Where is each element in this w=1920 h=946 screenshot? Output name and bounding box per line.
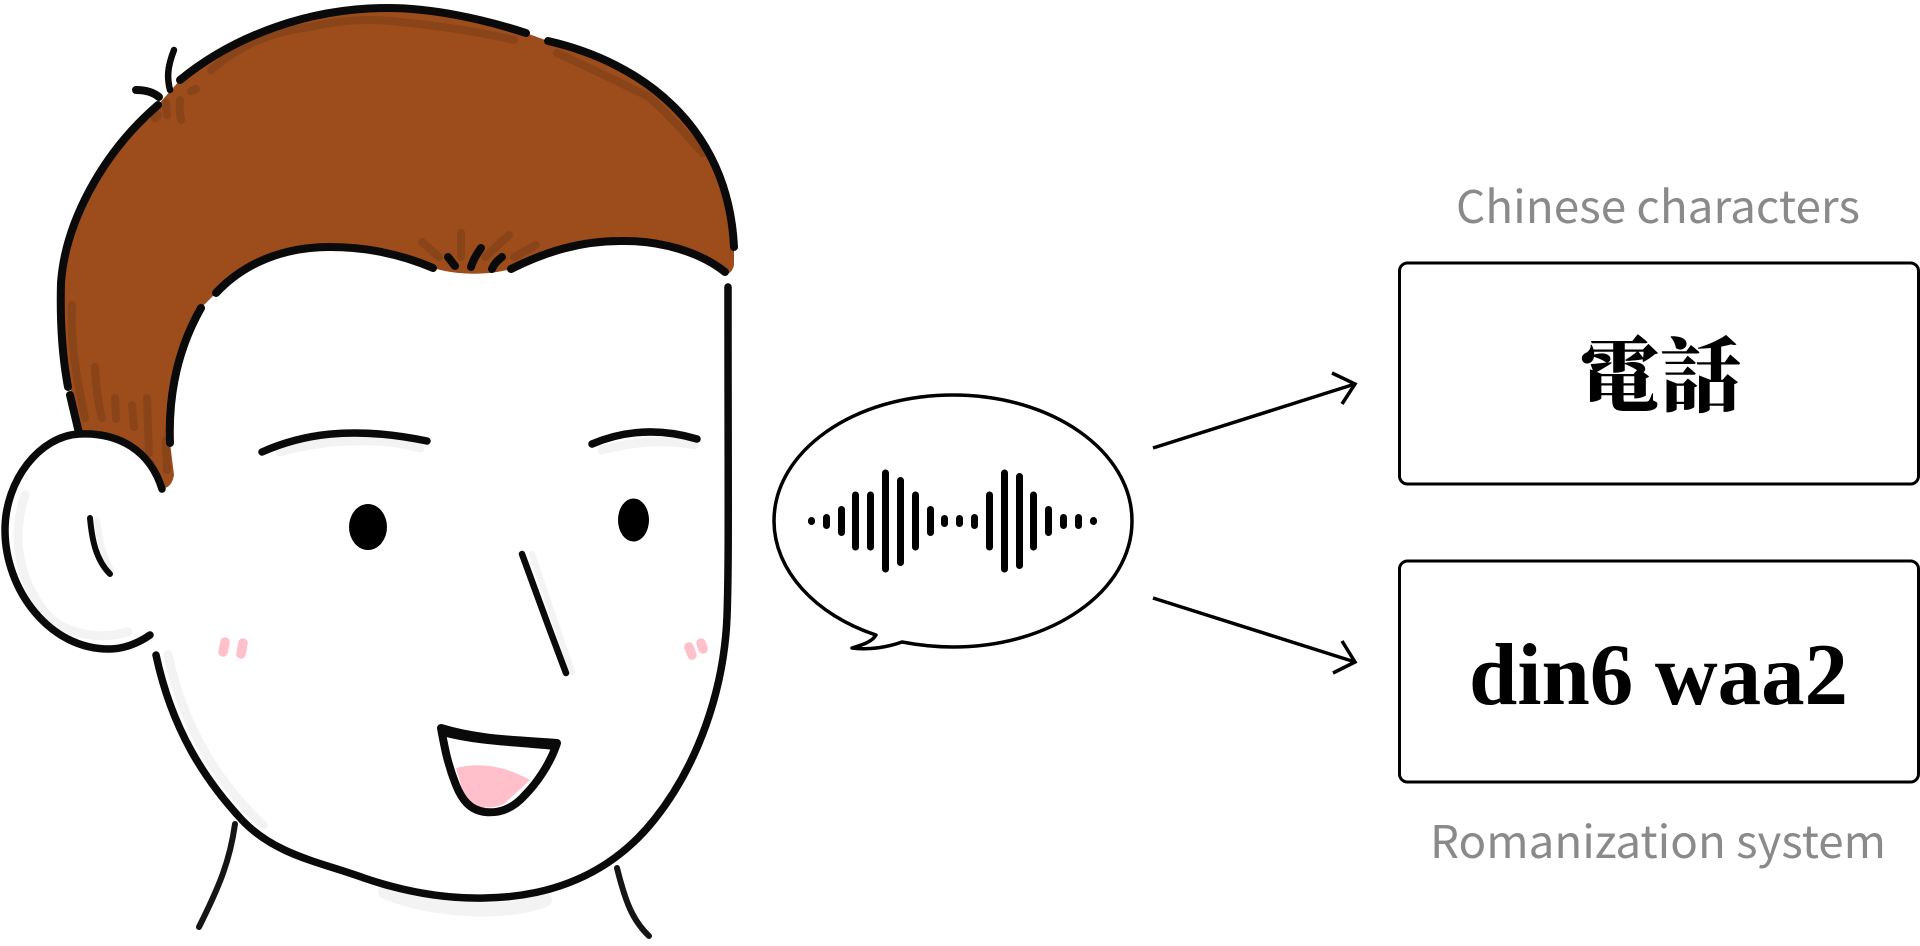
mouth top lip [443, 731, 555, 745]
hair outlines [61, 8, 734, 443]
bubble outline [774, 395, 1132, 649]
hair [61, 8, 734, 488]
illustration: smiling face with brown hair [5, 8, 734, 936]
cheeks [223, 642, 703, 655]
eyebrows [262, 432, 697, 452]
neck [199, 824, 649, 936]
hair fill [61, 8, 734, 488]
box: Chinese characters [1400, 263, 1918, 484]
box: romanization [1400, 561, 1918, 782]
tongue [456, 765, 530, 808]
arrow: to romanization [1153, 598, 1355, 673]
nose [522, 554, 566, 673]
speech bubble with sound wave [774, 395, 1132, 649]
mouth outline [441, 728, 557, 812]
eyes [349, 498, 649, 550]
text: din6 waa2: din6 waa2 [1469, 627, 1848, 724]
mouth [441, 728, 557, 812]
hair darker texture strokes [72, 20, 703, 470]
face shading: soft grey shadows [18, 441, 694, 909]
label: Romanization system: Romanization system [1430, 806, 1886, 871]
text: 電話: 電話 [1578, 312, 1741, 429]
arrow: to Chinese characters [1153, 373, 1355, 448]
label: Chinese characters: Chinese characters [1456, 171, 1860, 236]
face outline [156, 287, 728, 898]
ear [5, 434, 162, 649]
sound wave [808, 470, 1097, 572]
